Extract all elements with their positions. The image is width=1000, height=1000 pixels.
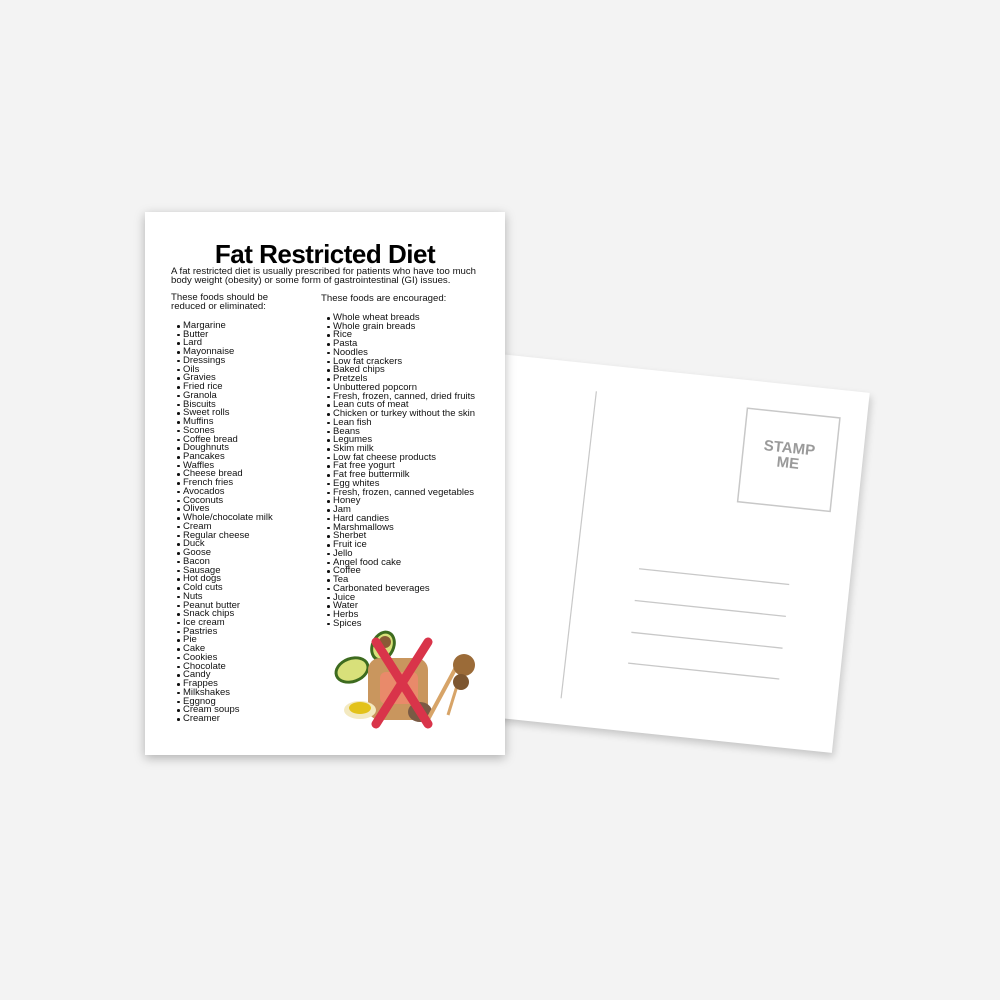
list: encouraged: Fat free yogurt bbox=[333, 460, 395, 471]
stamp box bbox=[738, 408, 840, 511]
list: reduce: Coffee bread bbox=[183, 434, 238, 445]
list: encouraged: Fresh, frozen, canned, dried fruits bbox=[333, 391, 475, 402]
list: reduce: Coconuts bbox=[183, 495, 223, 506]
list: encouraged: Fresh, frozen, canned vegetables bbox=[333, 487, 474, 498]
list: reduce: Ice cream bbox=[183, 617, 225, 628]
board and salmon bbox=[368, 658, 432, 722]
list: encouraged: Lean cuts of meat bbox=[333, 399, 409, 410]
list: encouraged: Herbs bbox=[333, 609, 358, 620]
list: encouraged: Angel food cake bbox=[333, 557, 401, 568]
list: reduce: Pastries bbox=[183, 626, 217, 637]
list: reduce: Chocolate bbox=[183, 661, 226, 672]
list: reduce: Regular cheese bbox=[183, 530, 250, 541]
list: encouraged: Fat free buttermilk bbox=[333, 469, 410, 480]
list: reduce: Waffles bbox=[183, 460, 214, 471]
list: reduce: Biscuits bbox=[183, 399, 216, 410]
list: reduce: Muffins bbox=[183, 416, 213, 427]
list: encouraged: Spices bbox=[333, 618, 362, 629]
list: encouraged: Fruit ice bbox=[333, 539, 367, 550]
list: reduce: Cookies bbox=[183, 652, 217, 663]
list: reduce: Sausage bbox=[183, 565, 221, 576]
list: reduce: Cheese bread bbox=[183, 468, 243, 479]
list: reduce: Oils bbox=[183, 364, 199, 375]
list: encouraged: Honey bbox=[333, 495, 360, 506]
avocado halves bbox=[331, 626, 401, 688]
list: encouraged: Pretzels bbox=[333, 373, 367, 384]
list: reduce: Duck bbox=[183, 538, 205, 549]
list: reduce: Whole/chocolate milk bbox=[183, 512, 273, 523]
list: encouraged: Sherbet bbox=[333, 530, 366, 541]
front postcard bbox=[145, 212, 505, 755]
list: encouraged: Skim milk bbox=[333, 443, 374, 454]
list: reduce: Milkshakes bbox=[183, 687, 230, 698]
list: reduce: Butter bbox=[183, 329, 208, 340]
list: encouraged bbox=[327, 312, 475, 629]
food illustration with red X bbox=[334, 630, 475, 728]
list: reduce: Creamer bbox=[183, 713, 220, 724]
list: encouraged: Jello bbox=[333, 548, 353, 559]
list: reduce: Bacon bbox=[183, 556, 210, 567]
list: encouraged: Whole wheat breads bbox=[333, 312, 420, 323]
list: reduce: Candy bbox=[183, 669, 210, 680]
list: encouraged: Chicken or turkey without the skin bbox=[333, 408, 475, 419]
list: reduce: Snack chips bbox=[183, 608, 234, 619]
list: encouraged: Lean fish bbox=[333, 417, 372, 428]
list: reduce: Frappes bbox=[183, 678, 218, 689]
list: reduce: Gravies bbox=[183, 372, 216, 383]
title: Fat Restricted Diet bbox=[215, 239, 435, 269]
spoons with seeds bbox=[425, 654, 475, 725]
list: reduce: Avocados bbox=[183, 486, 225, 497]
list: encouraged: Whole grain breads bbox=[333, 321, 415, 332]
oil dish bbox=[344, 701, 376, 719]
list: reduce: French fries bbox=[183, 477, 233, 488]
list: encouraged: Coffee bbox=[333, 565, 361, 576]
list: encouraged: Low fat cheese products bbox=[333, 452, 436, 463]
list: reduce: Sweet rolls bbox=[183, 407, 229, 418]
list: reduce: Lard bbox=[183, 337, 202, 348]
stamp box: STAMP bbox=[763, 437, 816, 459]
list: reduce: Cake bbox=[183, 643, 205, 654]
list: encouraged: Marshmallows bbox=[333, 522, 394, 533]
list: encouraged: Beans bbox=[333, 426, 360, 437]
list: encouraged: Juice bbox=[333, 592, 355, 602]
list: reduce: Margarine bbox=[183, 320, 226, 331]
list: encouraged: Legumes bbox=[333, 434, 372, 445]
left header: These foods should be reduced or eliminated: bbox=[171, 292, 268, 312]
list: encouraged: Noodles bbox=[333, 347, 368, 358]
list: reduce: Pie bbox=[183, 634, 197, 645]
list: reduce: Cream bbox=[183, 521, 212, 532]
list: reduce: Cold cuts bbox=[183, 582, 223, 593]
list: encouraged: Pasta bbox=[333, 338, 357, 349]
list: reduce: Nuts bbox=[183, 591, 203, 602]
list: encouraged: Carbonated beverages bbox=[333, 583, 430, 594]
intro text: A fat restricted diet is usually prescribed for patients who have too much body weight (obesity) or some form of gastrointestinal (GI) issues. bbox=[171, 266, 476, 286]
address lines bbox=[628, 569, 789, 679]
list: encouraged: Low fat crackers bbox=[333, 356, 402, 367]
list: encouraged: Jam bbox=[333, 504, 351, 515]
list: reduce: Doughnuts bbox=[183, 442, 229, 453]
list: reduce: Peanut butter bbox=[183, 600, 240, 610]
red X bbox=[376, 642, 428, 724]
list: reduce: Hot dogs bbox=[183, 573, 221, 584]
list: reduce: Eggnog bbox=[183, 696, 216, 707]
list: reduce: Fried rice bbox=[183, 381, 223, 392]
list: encouraged: Water bbox=[333, 600, 358, 611]
list: reduce: Cream soups bbox=[183, 704, 240, 715]
list: encouraged: Rice bbox=[333, 329, 352, 340]
list: encouraged: Tea bbox=[333, 574, 348, 585]
list: encouraged: Hard candies bbox=[333, 513, 389, 524]
list: encouraged: Baked chips bbox=[333, 364, 385, 375]
list: reduce: Dressings bbox=[183, 355, 225, 366]
list: reduce: Olives bbox=[183, 503, 209, 514]
stamp box: ME bbox=[776, 454, 800, 473]
list: reduce bbox=[177, 320, 273, 724]
list: reduce: Goose bbox=[183, 547, 211, 558]
list: encouraged: Unbuttered popcorn bbox=[333, 382, 417, 393]
right header: These foods are encouraged: bbox=[321, 293, 446, 304]
list: reduce: Granola bbox=[183, 390, 217, 401]
list: encouraged: Egg whites bbox=[333, 478, 379, 489]
list: reduce: Pancakes bbox=[183, 451, 225, 462]
list: reduce: Scones bbox=[183, 425, 215, 436]
list: reduce: Mayonnaise bbox=[183, 346, 234, 357]
